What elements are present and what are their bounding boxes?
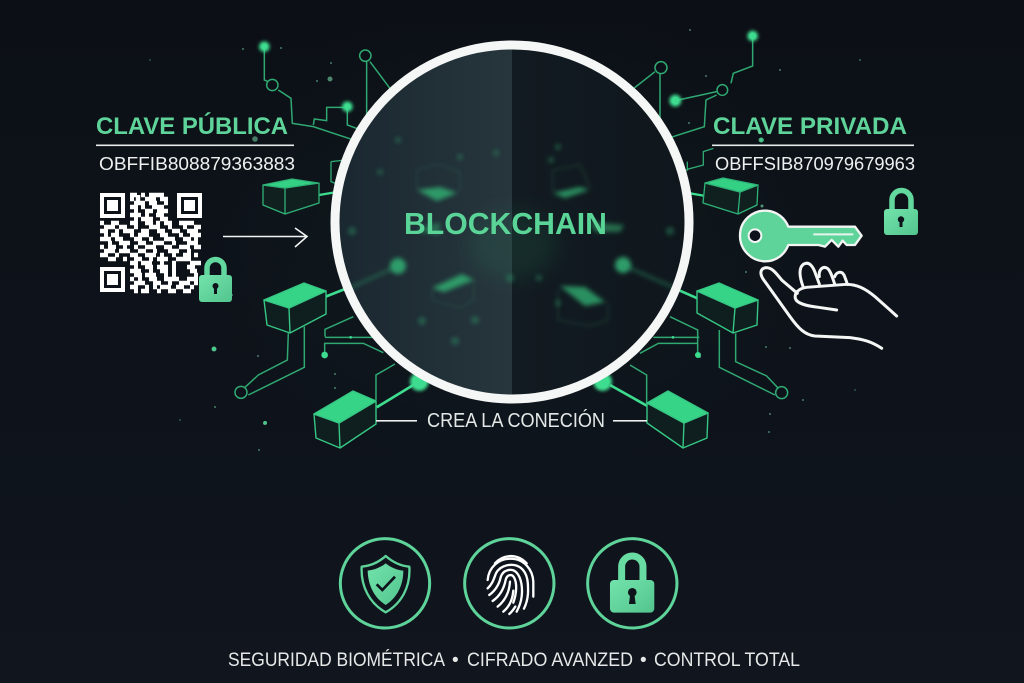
block: upper right bbox=[703, 178, 758, 214]
private key heading: CLAVE PRIVADA bbox=[713, 113, 907, 140]
connector right bbox=[613, 420, 647, 422]
background particles bbox=[149, 29, 861, 451]
arrow to blockchain bbox=[223, 228, 307, 247]
blurred network inside circle bbox=[348, 137, 675, 345]
hand bbox=[761, 263, 897, 348]
lock on QR code bbox=[199, 260, 232, 302]
icon: fingerprint bbox=[465, 539, 554, 628]
block: middle left bbox=[264, 283, 326, 333]
circuit: upper right bbox=[632, 31, 764, 196]
infographic canvas bbox=[96, 28, 918, 666]
private key rule bbox=[712, 144, 914, 146]
key bbox=[740, 211, 862, 261]
bottom caption: CIFRADO AVANZED bbox=[467, 650, 633, 671]
icon: large padlock bbox=[588, 539, 677, 628]
private key code: OBFFSIB870979679963 bbox=[715, 154, 915, 174]
public key code: OBFFIB808879363883 bbox=[99, 154, 295, 174]
public key heading: CLAVE PÚBLICA bbox=[96, 112, 288, 140]
circuit: upper left bbox=[259, 41, 392, 195]
connector left bbox=[376, 420, 417, 422]
padlock bbox=[884, 190, 918, 235]
block: lower right bbox=[647, 391, 708, 448]
circuit: lower right bbox=[593, 291, 788, 406]
block: upper left bbox=[263, 179, 319, 214]
public key panel bbox=[96, 112, 307, 302]
bottom caption: • bbox=[452, 650, 459, 671]
circle interior: light half bbox=[335, 45, 512, 399]
connection text: CREA LA CONECIÓN bbox=[427, 409, 605, 432]
bottom caption: SEGURIDAD BIOMÉTRICA bbox=[228, 650, 445, 671]
public key rule bbox=[96, 144, 294, 146]
bottom caption: • bbox=[640, 650, 647, 671]
icon: shield bbox=[340, 539, 430, 628]
block: middle right bbox=[697, 283, 758, 333]
bottom caption: CONTROL TOTAL bbox=[654, 650, 800, 671]
circuit: lower left bbox=[212, 288, 429, 424]
block: lower left bbox=[314, 391, 376, 448]
circle title: BLOCKCHAIN bbox=[404, 206, 607, 241]
private key panel bbox=[712, 113, 918, 348]
blockchain circle bbox=[335, 45, 689, 399]
circle interior: dark half bbox=[512, 50, 600, 373]
QR code bbox=[100, 193, 202, 292]
circle ring bbox=[335, 45, 689, 399]
